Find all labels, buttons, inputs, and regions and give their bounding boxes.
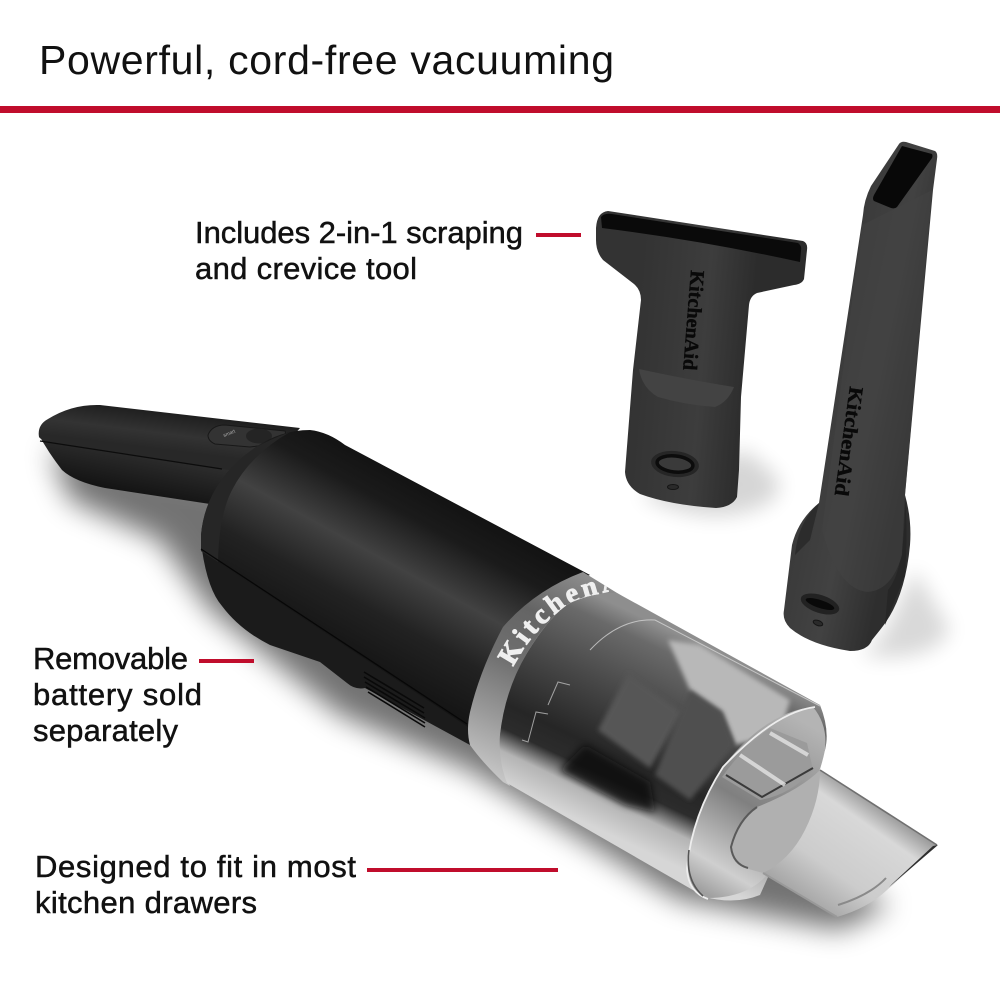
silver ring xyxy=(468,572,622,786)
body seam xyxy=(201,549,467,724)
end face xyxy=(687,707,826,898)
brand: KitchenAid xyxy=(830,385,867,497)
callout: scraping and crevice tool xyxy=(195,215,581,286)
callout: fits in drawers xyxy=(35,849,558,920)
canister contour xyxy=(590,620,820,706)
brand: KitchenAid xyxy=(678,270,708,371)
clear canister xyxy=(500,593,827,901)
nozzle neck xyxy=(730,770,860,880)
ledge xyxy=(639,369,734,407)
title: Powerful, cord-free vacuuming xyxy=(39,37,614,83)
handle top xyxy=(39,405,300,475)
port xyxy=(798,589,842,619)
tool: scraping tool xyxy=(596,211,807,516)
head opening xyxy=(601,214,801,262)
control buttons xyxy=(208,425,285,447)
nozzle opening xyxy=(873,146,932,208)
flared base panels xyxy=(795,503,819,555)
nozzle mouth xyxy=(722,728,813,800)
header rule xyxy=(0,106,1000,113)
callout: scraping and crevice tool: Includes 2-in-1 scraping xyxy=(195,215,523,250)
callout: removable battery: separately xyxy=(33,713,178,748)
callout: removable battery: battery sold xyxy=(33,677,202,712)
callout: fits in drawers: Designed to fit in most xyxy=(35,849,356,884)
inner cone xyxy=(598,683,678,768)
callout: removable battery: Removable xyxy=(33,641,188,676)
tool body xyxy=(784,142,937,651)
lower body xyxy=(202,540,490,745)
inner neck xyxy=(655,690,735,800)
tab details xyxy=(522,682,570,742)
seam xyxy=(40,441,222,469)
collar xyxy=(201,432,290,562)
hand vacuum xyxy=(38,405,938,917)
tool shadow xyxy=(640,450,779,516)
inner dark core xyxy=(560,745,655,812)
tool body xyxy=(596,211,807,508)
callout: scraping and crevice tool: and crevice tool xyxy=(195,251,417,286)
stem tongue xyxy=(822,190,932,592)
port xyxy=(650,449,700,479)
nozzle blade xyxy=(763,770,937,917)
callout: removable battery xyxy=(33,641,254,748)
vent xyxy=(364,672,425,727)
control buttons: smart xyxy=(223,428,237,439)
upper light patch xyxy=(668,640,790,745)
rim highlight xyxy=(687,707,815,899)
tool: crevice tool xyxy=(784,142,950,657)
callout: fits in drawers: kitchen drawers xyxy=(35,885,257,920)
vacuum shadow xyxy=(50,450,890,930)
handle underside xyxy=(39,435,240,505)
tool shadow xyxy=(860,570,950,657)
main body xyxy=(201,430,590,727)
